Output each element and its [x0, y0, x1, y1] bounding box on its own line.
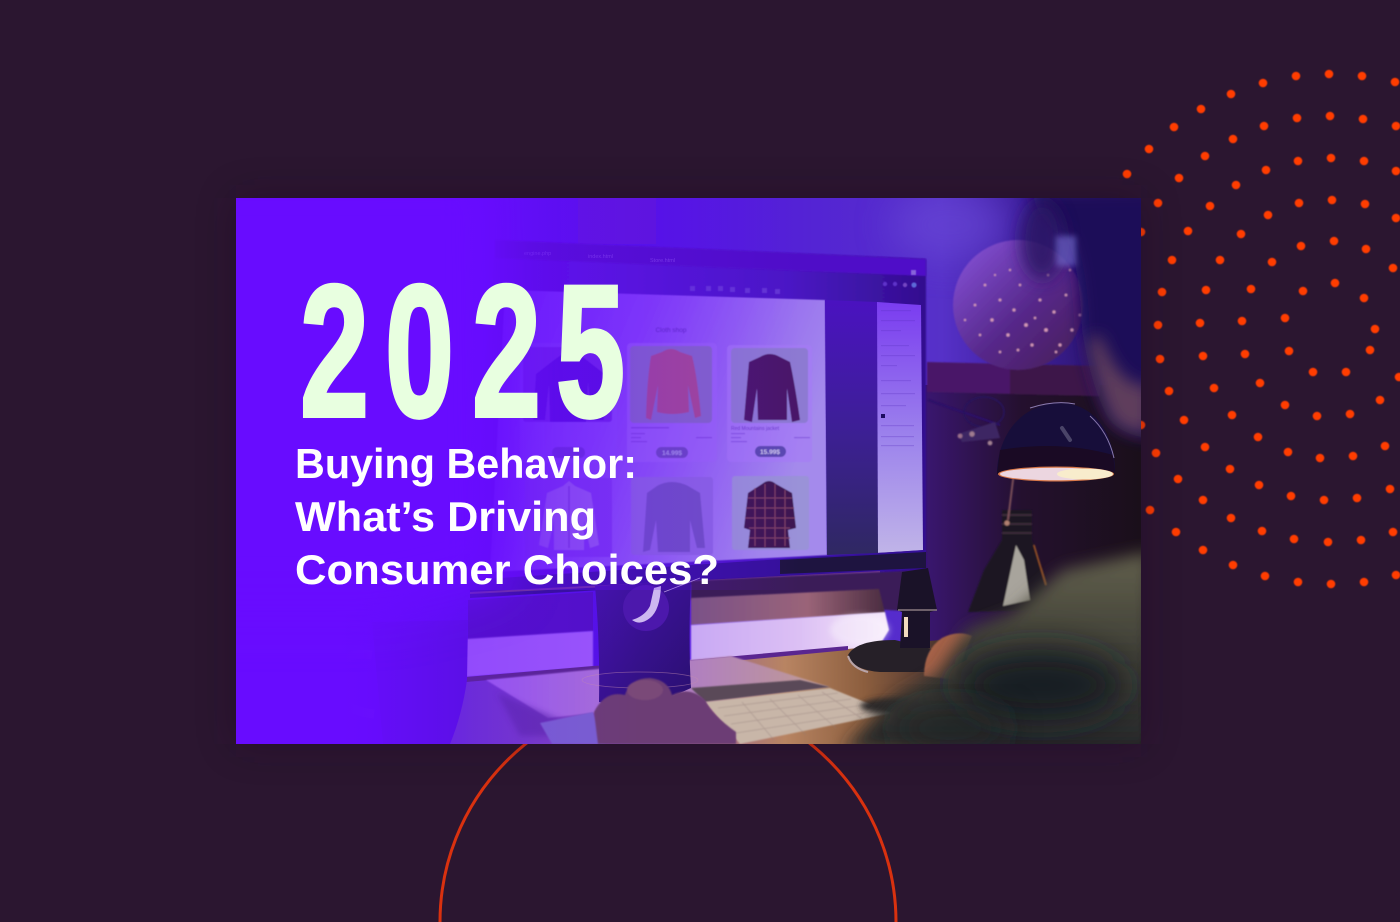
monitor bottom bezel — [470, 550, 926, 598]
shelf — [927, 362, 1100, 396]
light bar left — [466, 631, 593, 677]
price 14.99 pill: 14.99$ — [662, 450, 682, 457]
title: 2025 — [300, 246, 625, 456]
product card 5 — [631, 477, 713, 555]
monitor tab bar — [495, 240, 926, 276]
person head — [1020, 190, 1160, 440]
mug — [334, 620, 468, 744]
mauve wall behind monitor — [691, 589, 885, 625]
subtitle heading: Consumer Choices? — [295, 546, 719, 593]
thin orange edge line — [470, 571, 880, 594]
monitor frame — [546, 255, 927, 574]
person shoulder shirt — [843, 552, 1150, 750]
product card 1 — [532, 348, 612, 458]
desk — [440, 640, 940, 744]
mouse pad — [860, 698, 924, 714]
screen tab text: index.html — [588, 254, 613, 260]
screen toolbar icons — [690, 270, 917, 294]
monitor stand — [582, 578, 700, 705]
product card 4 — [539, 478, 612, 557]
product card 2 — [627, 327, 717, 462]
small keyboard left — [540, 712, 605, 744]
title: 2025: 0 — [385, 246, 454, 456]
monitor screen — [490, 290, 827, 572]
monitor stand foot — [848, 568, 937, 672]
screen tab text: engine.php — [524, 251, 551, 257]
orange circle outline at bottom — [440, 694, 896, 922]
product card 6: plaid shirt — [732, 476, 809, 550]
lower dark wall — [925, 385, 1141, 744]
light bar right — [691, 612, 890, 663]
screen right sidebar — [877, 302, 923, 553]
wall glow — [898, 198, 1014, 258]
desk lamp shade — [997, 403, 1115, 482]
subtitle heading — [295, 440, 719, 593]
wall background — [347, 198, 1118, 744]
globe lamp — [953, 240, 1083, 370]
screen tab text: Store.html — [650, 258, 675, 264]
dark block left of stand — [468, 592, 593, 640]
faint picture on wall — [578, 198, 656, 244]
purple fade overlay — [180, 160, 1141, 744]
product card 3 — [727, 345, 812, 462]
wrist rest — [691, 680, 830, 702]
desk edge line — [466, 646, 848, 682]
lamp bulb base — [968, 472, 1048, 612]
panel shadow — [236, 198, 1141, 744]
price 15.99 pill — [552, 447, 585, 458]
subtitle heading: What’s Driving — [295, 493, 596, 540]
keyboard — [705, 688, 892, 744]
product card 2: Cloth shop — [655, 327, 687, 334]
hand under shirt — [924, 633, 972, 680]
title: 2025: 2 — [300, 246, 369, 456]
screen dark side panel — [825, 300, 878, 555]
price 15.99 pill: 15.99$ — [760, 449, 780, 456]
laptop pad — [486, 656, 830, 718]
panel: hero photo with purple tint — [236, 198, 1141, 744]
desk shadow under pad — [500, 696, 559, 737]
title: 2025: 2 — [472, 246, 541, 456]
screen tab text — [524, 251, 675, 262]
title: 2025: 5 — [556, 246, 625, 456]
product card 3: Red Mountains jacket — [731, 426, 780, 432]
dark band under monitor — [691, 570, 926, 612]
hand on keyboard — [594, 678, 736, 744]
dot pattern: radial orange dots — [1123, 70, 1400, 588]
lamp arm — [928, 397, 1004, 445]
subtitle heading: Buying Behavior: — [295, 440, 637, 487]
